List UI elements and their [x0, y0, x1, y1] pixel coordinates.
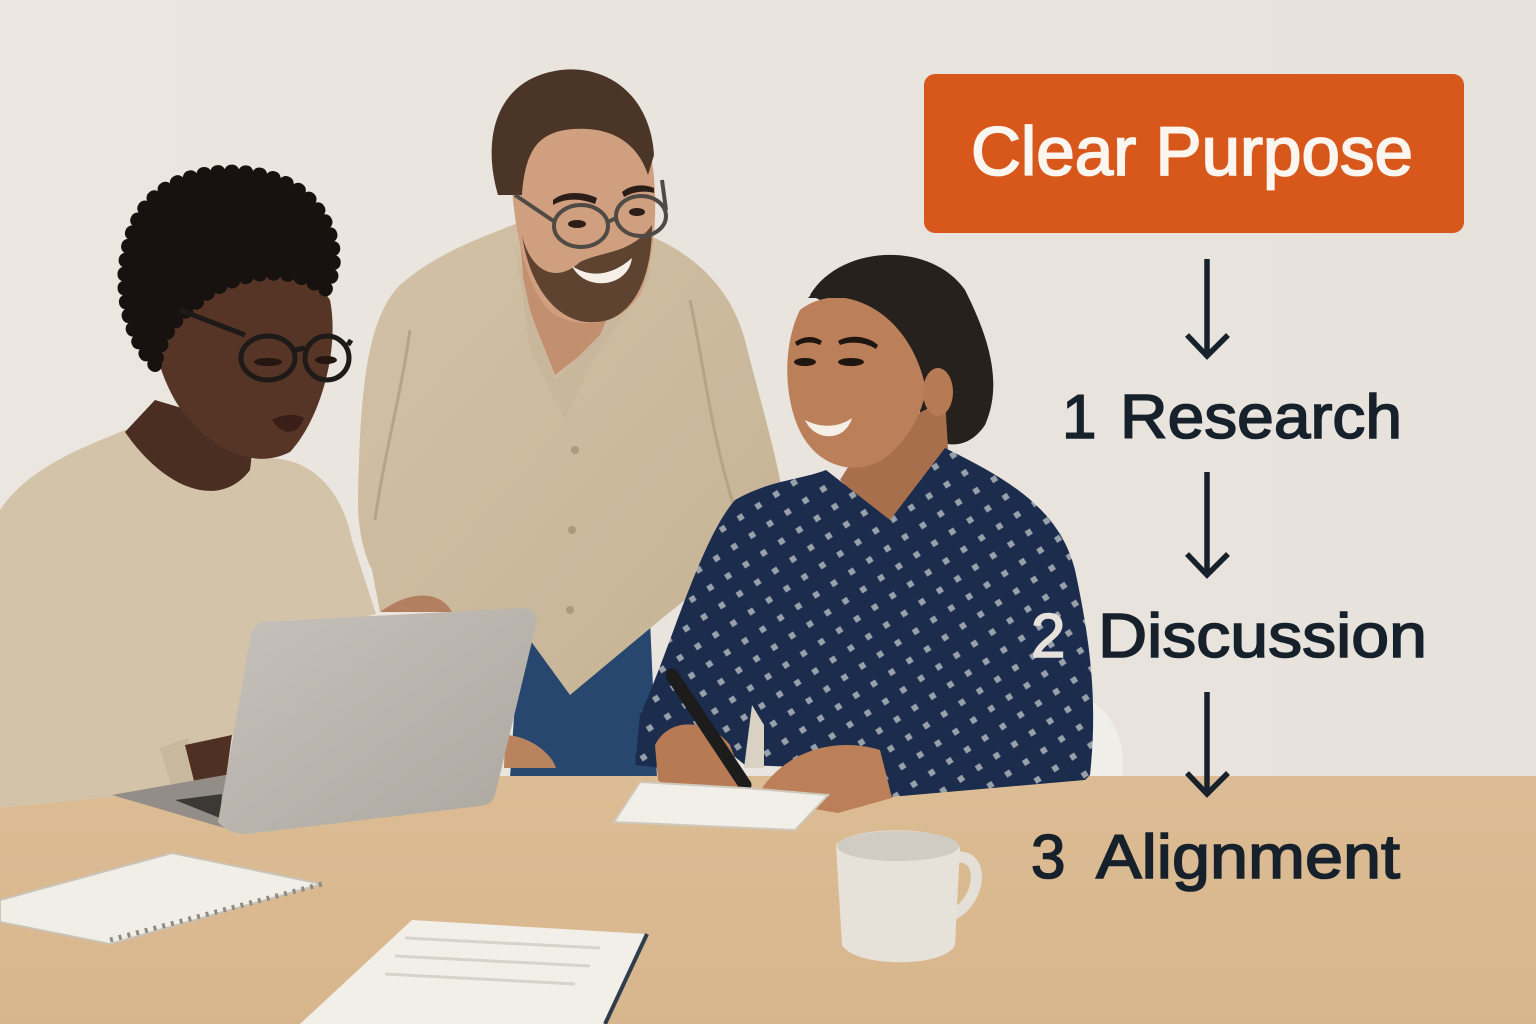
arrow: research to discussion	[1187, 472, 1228, 575]
right woman ear	[923, 368, 953, 416]
heading box: Clear Purpose: Clear Purpose	[971, 113, 1413, 190]
person: right woman	[635, 255, 1123, 813]
hair bun	[810, 255, 993, 444]
step 1 label: Research	[1120, 383, 1402, 452]
gap between arm and torso	[744, 705, 764, 768]
laptop lid	[218, 608, 536, 834]
chair	[1085, 700, 1123, 776]
coffee mug	[836, 830, 976, 962]
step 2 label: Discussion	[1098, 602, 1427, 671]
man hand on laptop	[380, 596, 452, 612]
woman neck	[125, 400, 255, 491]
man neck	[520, 235, 640, 375]
woman hand on laptop	[185, 735, 232, 785]
man sleeve fold	[375, 300, 735, 520]
right woman blouse	[635, 448, 1093, 797]
woman eyes, nose and lips	[254, 356, 337, 432]
shirt buttons	[566, 446, 579, 614]
right woman eyes and brows	[794, 337, 878, 366]
man trousers	[510, 620, 657, 778]
man open collar	[515, 240, 652, 420]
step 3 label: Alignment	[1096, 823, 1400, 892]
sweater cuff	[160, 738, 200, 788]
woman hair	[124, 172, 334, 365]
right woman face	[787, 297, 928, 468]
notepad under hand	[614, 782, 828, 830]
table	[0, 776, 1536, 1024]
pen	[672, 675, 745, 785]
step 3 label: 3	[1031, 823, 1065, 892]
laptop	[112, 608, 536, 834]
man shirt	[358, 222, 782, 695]
laptop base	[112, 775, 300, 834]
man beard	[522, 225, 652, 322]
man eyes and brows	[553, 185, 654, 228]
right woman fringe	[808, 273, 955, 410]
heading box: Clear Purpose	[924, 74, 1464, 233]
man face	[510, 115, 655, 323]
right woman neck	[840, 400, 950, 530]
man glasses	[515, 180, 666, 247]
right woman smile	[805, 418, 852, 436]
woman glasses	[180, 310, 351, 380]
person: standing man	[358, 69, 782, 778]
step 2 label: 2	[1031, 602, 1065, 671]
arrow: purpose to research	[1187, 259, 1228, 356]
step 1 label: 1	[1062, 383, 1096, 452]
woman sweater	[0, 430, 376, 808]
arrow: discussion to alignment	[1187, 692, 1228, 794]
person: left woman	[0, 172, 376, 808]
keyboard	[175, 794, 222, 818]
woman face	[150, 270, 333, 459]
spiral notebook	[0, 853, 322, 944]
right woman hands	[655, 724, 745, 794]
man smile	[572, 258, 632, 283]
document folder	[300, 920, 647, 1024]
man hair	[492, 69, 654, 195]
man hand on table	[504, 735, 556, 768]
